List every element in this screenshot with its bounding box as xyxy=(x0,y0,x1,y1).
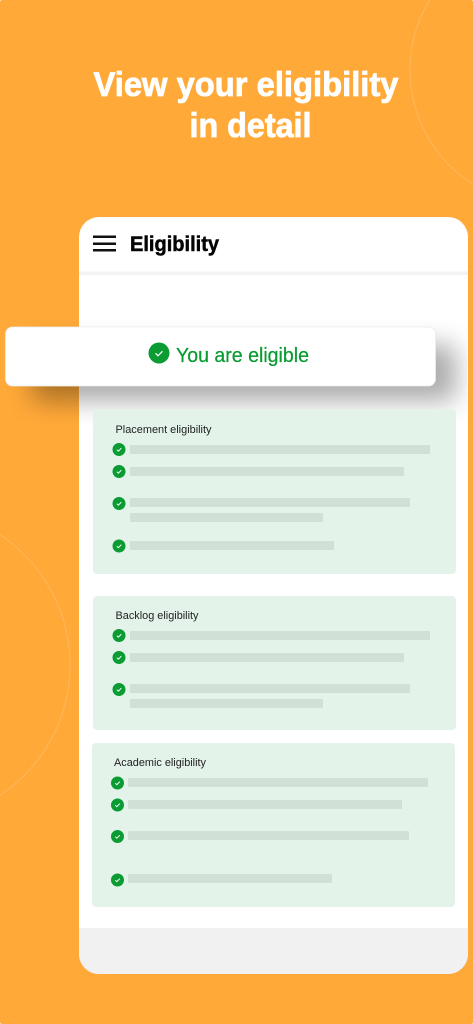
icon: hamburger menu xyxy=(93,236,116,252)
callout shadow xyxy=(32,345,456,401)
header divider xyxy=(79,272,468,275)
panel: placement eligibility xyxy=(93,409,456,574)
panel: backlog eligibility xyxy=(93,596,456,730)
check icons xyxy=(112,629,126,696)
panel heading: Academic eligibility xyxy=(114,757,206,769)
placeholder lines xyxy=(130,445,430,550)
placeholder lines xyxy=(130,631,430,708)
title xyxy=(94,66,399,145)
callout: you are eligible xyxy=(6,327,436,386)
check icons xyxy=(111,776,124,886)
title: View your eligibility xyxy=(94,66,399,104)
phone screen xyxy=(79,217,468,974)
placeholder lines xyxy=(128,778,428,883)
check icons xyxy=(112,443,126,552)
panel: academic eligibility xyxy=(92,743,455,907)
callout card xyxy=(6,327,436,386)
icon: eligible check xyxy=(148,342,170,364)
callout text: You are eligible xyxy=(176,345,309,367)
panel heading: Placement eligibility xyxy=(116,424,212,436)
screen heading: Eligibility xyxy=(130,233,219,256)
footer bar xyxy=(79,928,468,974)
title: in detail xyxy=(190,107,312,145)
panel heading: Backlog eligibility xyxy=(116,610,199,622)
